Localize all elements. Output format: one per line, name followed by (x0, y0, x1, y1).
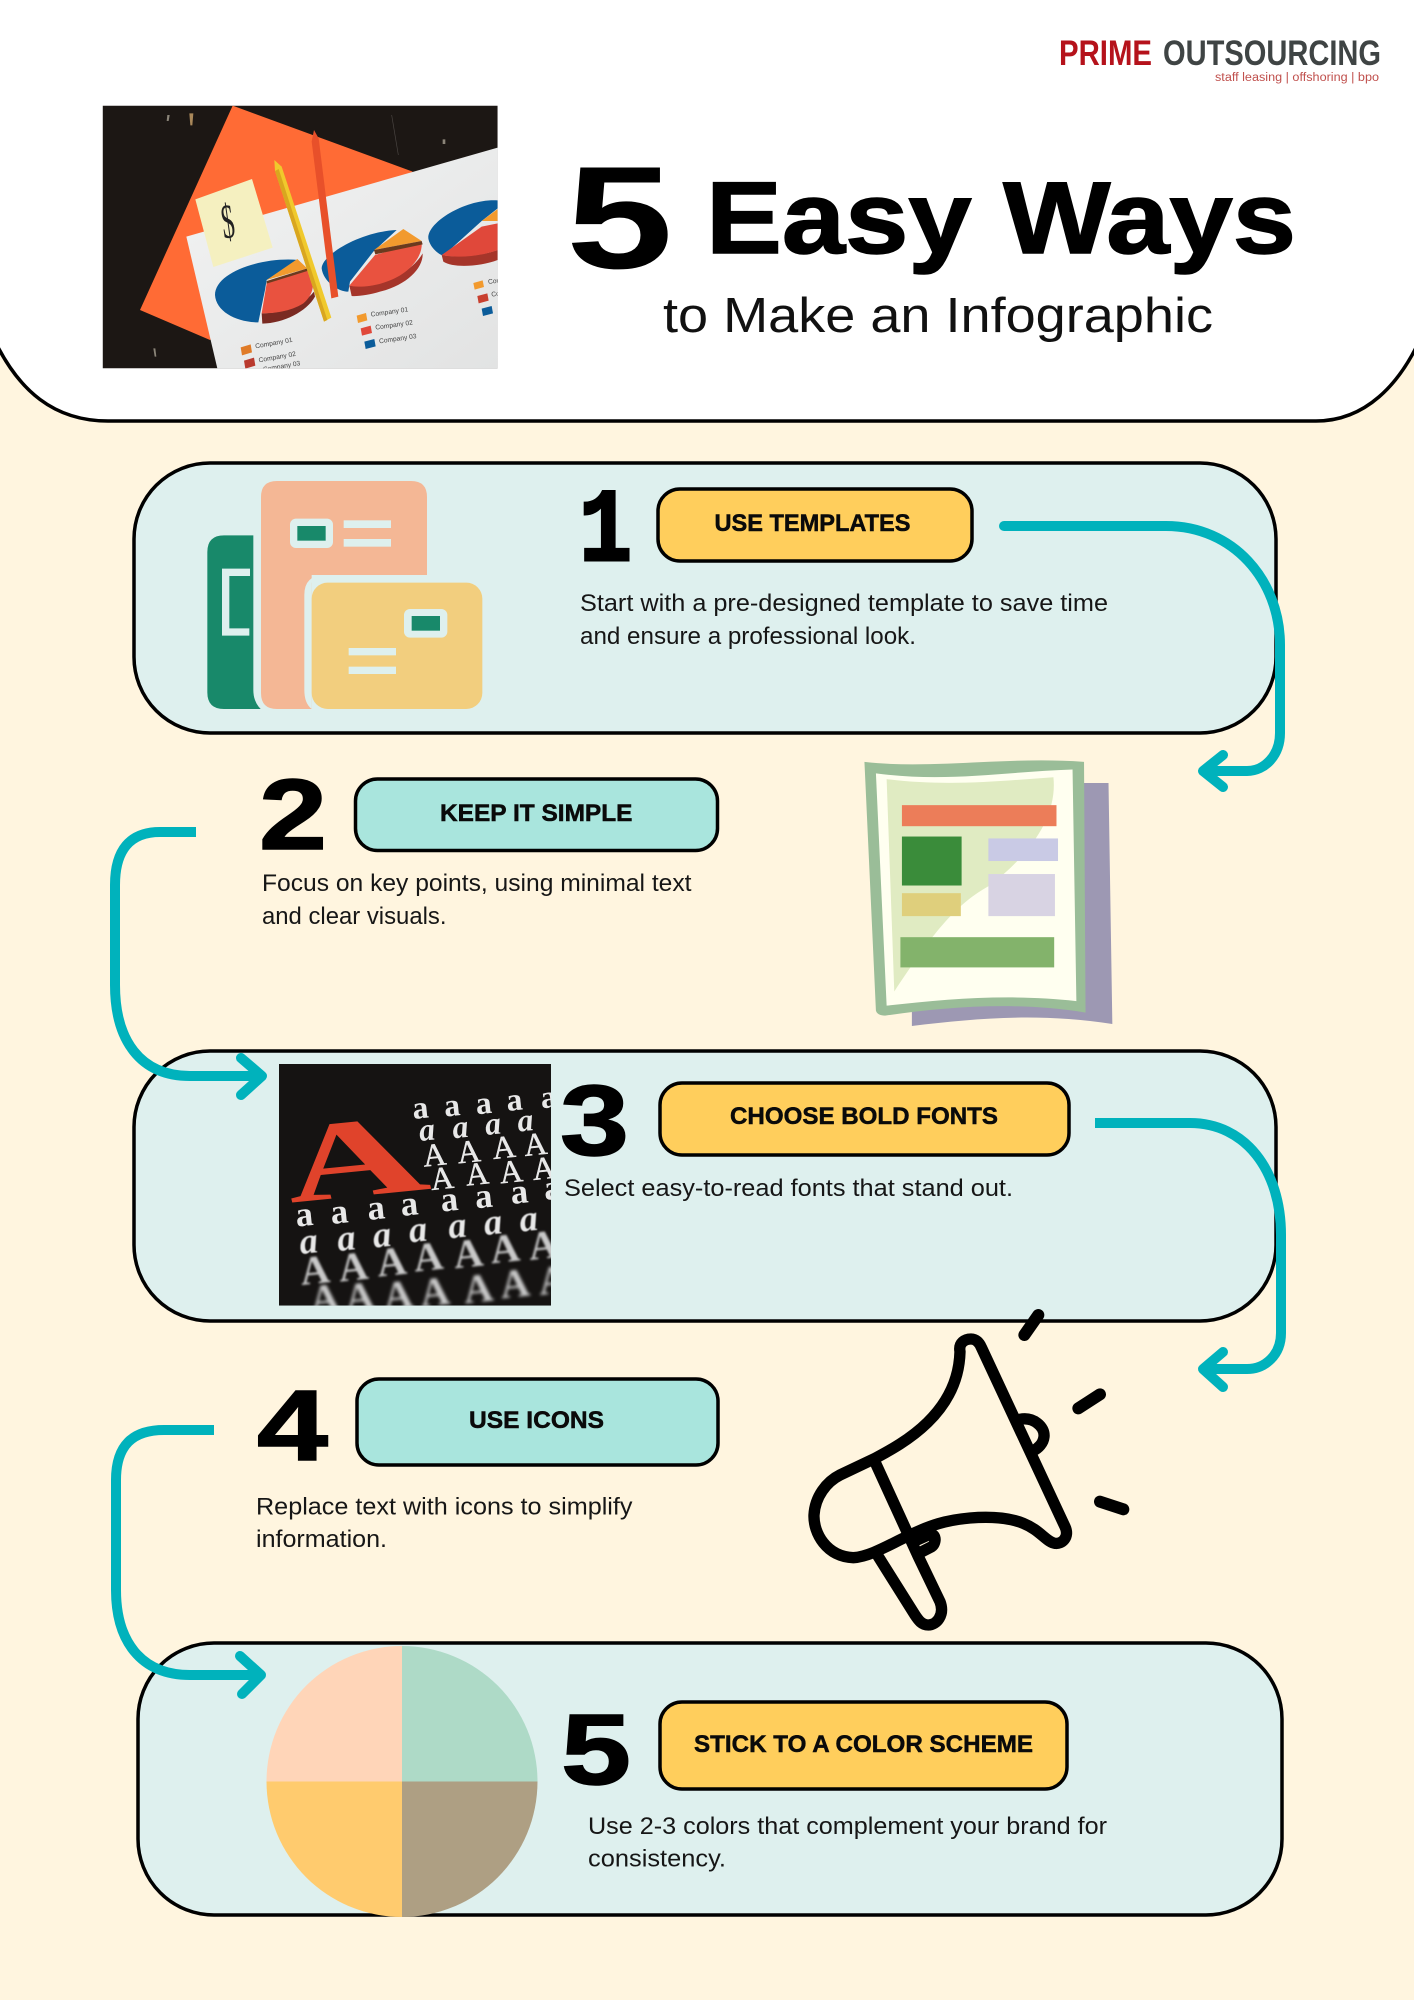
title: 5 (566, 136, 673, 299)
button: choose bold fonts (660, 1083, 1069, 1155)
icon: document illustration (864, 760, 1112, 1026)
text: step 1 description (580, 590, 1108, 650)
title: Easy Ways (706, 161, 1296, 275)
number 1: 1 (579, 474, 632, 592)
photo: pie charts on paper with pencils: $ (218, 194, 238, 250)
photo: pie charts on paper with pencils (103, 106, 530, 374)
title: to Make an Infographic (663, 289, 1213, 343)
button: use templates: USE TEMPLATES (714, 510, 910, 537)
photo: pie charts on paper with pencils: Company 03 (262, 360, 301, 374)
icon: megaphone (814, 1315, 1123, 1625)
panel: step 5 background (138, 1643, 1282, 1915)
button: choose bold fonts: CHOOSE BOLD FONTS (730, 1103, 998, 1130)
number 3: 3 (560, 1065, 629, 1177)
text: step 3 description: Select easy-to-read fonts that stand out. (564, 1175, 1013, 1202)
photo: pie charts on paper with pencils: Company 01 (370, 306, 409, 319)
photo: pie charts on paper with pencils: Company 03 (379, 333, 417, 345)
text: step 5 description: consistency. (588, 1846, 726, 1872)
photo: typography letters (279, 1064, 551, 1306)
panel: step 3 background (134, 1051, 1276, 1321)
button: use templates (658, 489, 972, 561)
number 5: 5 (561, 1694, 631, 1806)
number 4: 4 (257, 1370, 328, 1482)
text: step 1 description: Start with a pre-designed template to save time (580, 590, 1108, 617)
photo: typography letters: aaaaaaaa (293, 1167, 563, 1235)
text: step 4 description: information. (256, 1526, 387, 1553)
title (566, 136, 1296, 343)
photo: typography letters: AAAAAAA (298, 1221, 561, 1294)
photo: typography letters: AAAAAAA (308, 1256, 571, 1322)
photo: pie charts on paper with pencils: Company 02 (258, 351, 297, 364)
arrow: step 4 to step 5 (116, 1430, 261, 1694)
photo: pie charts on paper with pencils: Company 02 (375, 319, 414, 332)
logo: Prime Outsourcing: staff leasing | offshoring | bpo (1215, 72, 1379, 84)
photo: typography letters: aaaaa (410, 1078, 558, 1126)
panel: step 1 background (134, 463, 1276, 733)
text: step 5 description: Use 2-3 colors that complement your brand for (588, 1813, 1107, 1840)
chart: four colour scheme circle (266, 1646, 538, 1917)
photo: typography letters: aaaaaaa (297, 1197, 540, 1262)
arrow: step 1 to step 2 (1004, 526, 1280, 787)
text: step 4 description: Replace text with icons to simplify (256, 1494, 632, 1520)
photo: pie charts on paper with pencils: Company 01 (255, 337, 293, 350)
button: stick to a color scheme: STICK TO A COLOR SCHEME (694, 1731, 1033, 1758)
button: use icons: USE ICONS (469, 1407, 604, 1434)
arrow: step 3 to step 4 (1095, 1123, 1281, 1387)
photo: typography letters: aaaa (417, 1101, 535, 1148)
button: use icons (357, 1379, 718, 1465)
text: step 2 description: and clear visuals. (262, 903, 446, 930)
photo: typography letters: A (266, 1090, 439, 1227)
photo: typography letters: AAAA (421, 1125, 549, 1174)
photo: pie charts on paper with pencils: Company 01 (488, 274, 526, 286)
text: step 4 description (256, 1494, 632, 1553)
button: keep it simple (356, 779, 718, 850)
text: step 2 description: Focus on key points, using minimal text (262, 870, 692, 897)
header band (0, 0, 1414, 421)
text: step 5 description (588, 1813, 1107, 1872)
arrow: step 2 to step 3 (115, 832, 262, 1095)
button: keep it simple: KEEP IT SIMPLE (440, 800, 632, 827)
button: stick to a color scheme (660, 1702, 1067, 1789)
icon: stacked template documents (207, 481, 482, 709)
photo: typography letters: AAAA (429, 1149, 557, 1197)
photo: pie charts on paper with pencils: Company 02 (491, 286, 530, 299)
logo: Prime Outsourcing (1059, 34, 1381, 84)
logo: Prime Outsourcing: PRIME (1059, 34, 1152, 73)
text: step 2 description (262, 870, 692, 930)
text: step 1 description: and ensure a professional look. (580, 623, 916, 650)
number 2: 2 (259, 759, 327, 871)
